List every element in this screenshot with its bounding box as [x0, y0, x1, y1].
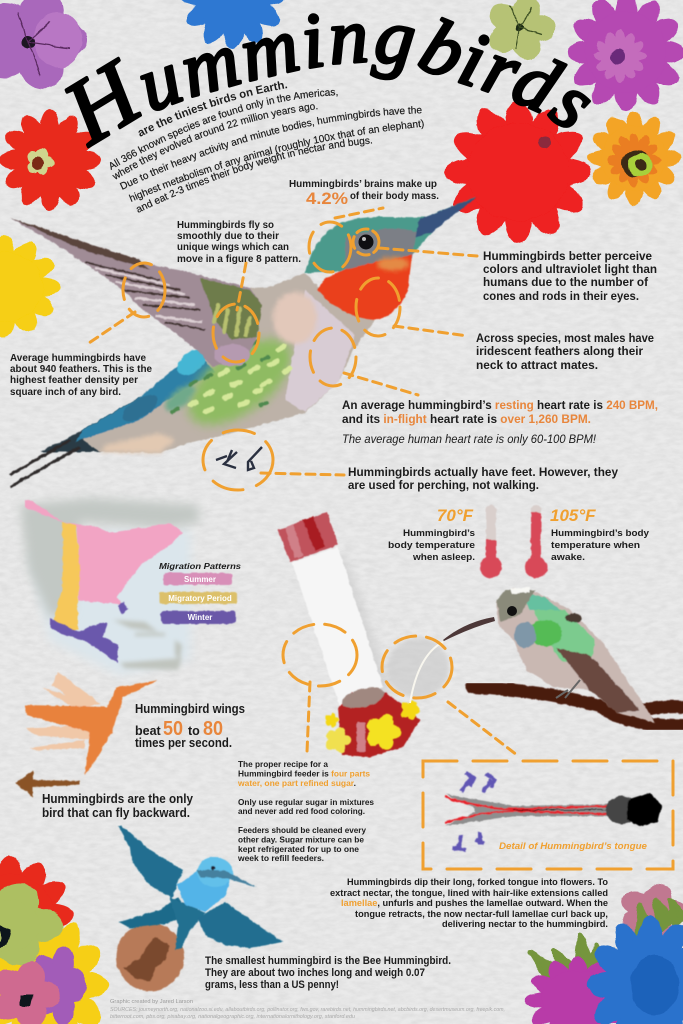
- text: asleep temperature: Hummingbird’s: [403, 527, 475, 538]
- text: awake temperature: awake.: [551, 551, 585, 562]
- dashed frame: [423, 761, 673, 869]
- text: feeder recipe: The proper recipe for a: [238, 759, 328, 769]
- text: credits and sources: [110, 999, 505, 1020]
- migration legend: Summer: [184, 575, 216, 584]
- bird tail: [10, 397, 150, 487]
- text: feeder recipe: Only use regular sugar in mixtures: [238, 797, 374, 807]
- text: feeder recipe: Feeders should be cleaned every: [238, 825, 366, 835]
- land wash: [20, 498, 200, 618]
- migration legend: Winter: [188, 613, 212, 622]
- magenta flower: [525, 957, 631, 1024]
- white tongue: [410, 642, 443, 703]
- text: heart rate: and its in-flight heart rate is over 1,260 BPM.: [342, 412, 591, 426]
- green petunia: [0, 879, 63, 971]
- feeder cap: [278, 512, 338, 562]
- sea wash: [30, 530, 190, 675]
- thermometer: awake: [525, 505, 547, 578]
- text: feet: [348, 465, 618, 492]
- flower centers: [0, 925, 33, 1006]
- red flower: [0, 856, 73, 974]
- text: figure 8 wings: move in a figure 8 pattern.: [177, 254, 301, 265]
- text: awake temperature: [550, 506, 650, 562]
- text: brain mass: 4.2%: [306, 189, 348, 208]
- text: heart rate: An average hummingbird’s resting heart rate is 240 BPM,: [342, 398, 658, 412]
- text: awake temperature: temperature when: [551, 539, 640, 550]
- text: heart rate: [342, 398, 658, 446]
- text: brain mass: of their body mass.: [350, 191, 439, 202]
- text: awake temperature: Hummingbird’s body: [551, 527, 650, 538]
- feeder illustration: [278, 512, 517, 757]
- text: backward flight: [42, 792, 193, 820]
- feeder callouts: [283, 624, 357, 686]
- tongue wash: [387, 638, 449, 698]
- intro text block: and eat 2-3 times their body weight in nectar and bugs.: [136, 138, 372, 212]
- summer range: [25, 500, 183, 605]
- text: feathers: square inch of any bird.: [10, 387, 121, 398]
- text: color perception: [483, 249, 657, 303]
- text: backward flight: Hummingbirds are the only: [42, 792, 193, 806]
- bird feet: [216, 447, 262, 470]
- bird wing: [10, 218, 262, 367]
- intro text block: are the tiniest birds on Earth.: [138, 81, 288, 136]
- flower: orange zinnia: [587, 111, 681, 205]
- intro text block: where they evolved around 22 million years ago.: [112, 104, 318, 180]
- winter range: [50, 601, 128, 663]
- branch: [472, 687, 683, 726]
- panel: tongue detail: [423, 761, 673, 869]
- text: figure 8 wings: [177, 220, 301, 265]
- text: asleep temperature: [388, 506, 475, 562]
- text: tongue explanation: extract nectar, the tongue, lined with hair-like extensions called: [330, 887, 608, 898]
- intro text block: [110, 81, 424, 212]
- bee hummingbird illustration: [116, 826, 283, 991]
- text: heart rate: The average human heart rate is only 60-100 BPM!: [342, 432, 597, 446]
- text: asleep temperature: body temperature: [388, 539, 475, 550]
- text: feeder recipe: water, one part refined sugar.: [237, 778, 356, 788]
- flower: top left purple petunia: [0, 0, 87, 95]
- text: bee hummingbird: They are about two inches long and weigh 0.07: [205, 967, 425, 979]
- bird head and throat: [305, 197, 477, 320]
- caribbean islands: [113, 620, 182, 670]
- text: asleep temperature: when asleep.: [412, 551, 475, 562]
- text: feathers: Average hummingbirds have: [10, 353, 146, 364]
- feeder bottle: [292, 547, 383, 707]
- flower: top blue: [180, 0, 286, 49]
- text: feeder recipe: week to refill feeders.: [237, 853, 324, 863]
- penny: [116, 923, 184, 991]
- flower: big red gerbera: [445, 101, 591, 243]
- yellow flower: [0, 914, 108, 1024]
- migration legend: Migration Patterns: [159, 561, 241, 571]
- text: wing beats: Hummingbird wings: [135, 702, 245, 716]
- intro text block: highest metabolism of any animal (roughly 100x that of an elephant): [128, 119, 424, 202]
- feeder flowers: [324, 699, 420, 754]
- feeder shadow: [300, 555, 392, 712]
- orange dashed callouts on bird: [89, 208, 477, 490]
- text: wing beats: times per second.: [135, 736, 232, 750]
- text: figure 8 wings: unique wings which can: [177, 242, 289, 253]
- text: brain mass: [289, 179, 439, 208]
- text: color perception: cones and rods in their eyes.: [483, 289, 639, 303]
- caption: Detail of Hummingbird’s tongue: [499, 841, 648, 852]
- text: iridescent feathers: [476, 331, 654, 372]
- arrow: backward flight: [15, 770, 80, 797]
- text: tongue explanation: [330, 876, 608, 929]
- tongue: [445, 793, 662, 826]
- text: iridescent feathers: neck to attract mates.: [476, 358, 598, 372]
- migration legend: Migratory Period: [168, 594, 232, 603]
- perched hummingbird: [443, 587, 655, 722]
- purple petunia: [28, 941, 87, 1024]
- text: iridescent feathers: iridescent feathers along their: [476, 344, 643, 358]
- text: bee hummingbird: The smallest hummingbird is the Bee Hummingbird.: [205, 955, 451, 967]
- migratory range: [53, 522, 80, 632]
- perched bird feet: [556, 680, 580, 698]
- mauve flower: [616, 881, 683, 943]
- green buds: [530, 900, 683, 985]
- flower cluster: bottom left: [0, 856, 108, 1024]
- flower: left red zinnia: [0, 109, 101, 211]
- text: bee hummingbird: [205, 955, 451, 991]
- text: feeder recipe: and never add red food coloring.: [238, 806, 365, 816]
- text: figure 8 wings: Hummingbirds fly so: [177, 220, 274, 231]
- migration legend: [159, 561, 241, 624]
- text: color perception: Hummingbirds better perceive: [483, 249, 652, 263]
- text: wing beats: to: [188, 724, 200, 738]
- perched bird eye: [507, 606, 517, 616]
- text: color perception: colors and ultraviolet light than: [483, 262, 657, 276]
- pink petunia: [0, 958, 61, 1024]
- text: color perception: humans due to the number of: [483, 275, 648, 289]
- intro text block: Due to their heavy activity and minute bodies, hummingbirds have the: [120, 106, 422, 190]
- perched bird body: [497, 587, 655, 722]
- text: feathers: [10, 353, 152, 398]
- text: asleep temperature: 70°F: [437, 506, 474, 525]
- text: wing beats: [135, 702, 245, 750]
- text: feeder recipe: [237, 759, 374, 863]
- thermometer: asleep: [480, 505, 502, 578]
- text: tongue explanation: lamellae, unfurls and pushes the lamellae outward. When the: [341, 897, 608, 908]
- text: feathers: highest feather density per: [10, 375, 138, 386]
- flower: left yellow: [0, 236, 61, 338]
- icon: orange wing-beat hummingbird: [25, 672, 158, 775]
- perched bird beak: [443, 617, 495, 641]
- intro text block: All 366 known species are found only in the Americas,: [110, 89, 338, 170]
- text: feet: Hummingbirds actually have feet. However, they: [348, 465, 618, 479]
- text: credits and sources: Graphic created by Jared Larson: [110, 999, 193, 1005]
- text: feet: are used for perching, not walking.: [348, 478, 539, 492]
- text: credits and sources: bitterroot.com, pbs.org, pixabay.org, nationalgeographic.org, internationalornithology.org, stanford.edu: [110, 1014, 355, 1020]
- text: feeder recipe: Hummingbird feeder is four parts: [238, 768, 370, 778]
- feeder base: [338, 684, 420, 757]
- text: feeder recipe: kept refrigerated for up to one: [238, 844, 359, 854]
- flower cluster: bottom right: [525, 881, 683, 1024]
- text: wing beats: 80: [203, 718, 223, 740]
- flower: top right green petunia: [484, 0, 555, 63]
- text: feeder recipe: other day. Sugar mixture can be: [238, 834, 364, 844]
- text: credits and sources: SOURCES: journeynorth.org, nationalzoo.si.edu, allaboutbirds.org, pollinator.org, fws.gov, rarebirds.net, hummingbirds.net, abcbirds.org, desertmuseum.org, freepik.com,: [110, 1007, 505, 1013]
- purple arrows: [453, 773, 495, 851]
- flower: top right magenta zinnia: [567, 0, 683, 111]
- bird eye: [358, 234, 374, 250]
- bird body: [75, 273, 375, 453]
- text: bee hummingbird: grams, less than a US penny!: [205, 979, 339, 991]
- text: tongue explanation: tongue retracts, the now nectar-full lamellae curl back up,: [355, 908, 608, 919]
- blue flower: [587, 916, 683, 1024]
- bird: [118, 826, 283, 950]
- text: wing beats: beat: [135, 724, 162, 738]
- text: brain mass: Hummingbirds’ brains make up: [289, 179, 437, 190]
- migration map: [20, 498, 200, 675]
- text: feathers: about 940 feathers. This is the: [10, 364, 152, 375]
- text: figure 8 wings: smoothly due to their: [177, 231, 279, 242]
- text: backward flight: bird that can fly backward.: [42, 806, 190, 820]
- text: tongue explanation: Hummingbirds dip their long, forked tongue into flowers. To: [347, 876, 608, 887]
- thermometers: [480, 505, 547, 578]
- big hummingbird illustration: [10, 197, 477, 487]
- text: wing beats: 50: [163, 718, 183, 740]
- text: tongue explanation: delivering nectar to the hummingbird.: [442, 918, 608, 929]
- text: awake temperature: 105°F: [550, 506, 596, 525]
- text: iridescent feathers: Across species, most males have: [476, 331, 654, 345]
